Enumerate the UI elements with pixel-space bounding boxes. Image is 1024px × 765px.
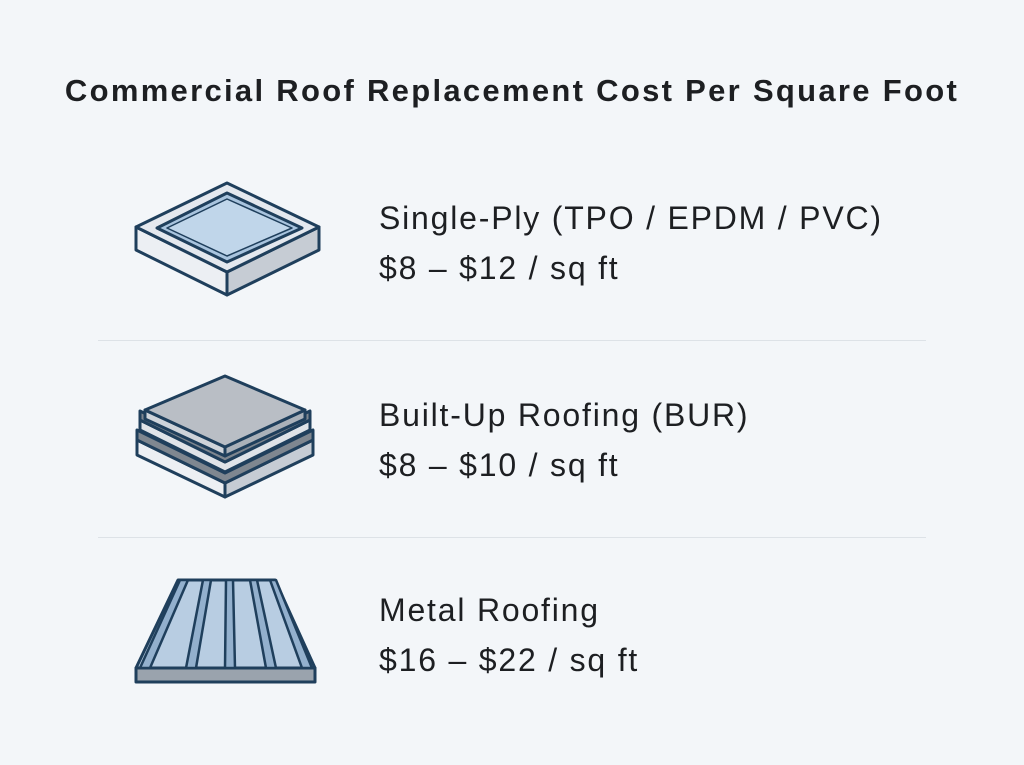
icon: metal <box>136 580 315 682</box>
text: single-ply <box>379 200 883 286</box>
icon: built-up <box>137 376 313 497</box>
text: single-ply: Single-Ply (TPO / EPDM / PVC) <box>379 200 883 236</box>
text: single-ply: $8 – $12 / sq ft <box>379 250 620 286</box>
text: built-up: Built-Up Roofing (BUR) <box>379 397 749 433</box>
text: built-up <box>379 397 749 483</box>
title: Commercial Roof Replacement Cost Per Square Foot <box>65 73 959 108</box>
icon: single-ply <box>136 183 319 295</box>
text: built-up: $8 – $10 / sq ft <box>379 447 620 483</box>
text: metal <box>379 592 639 678</box>
text: metal: Metal Roofing <box>379 592 600 628</box>
text: metal: $16 – $22 / sq ft <box>379 642 639 678</box>
